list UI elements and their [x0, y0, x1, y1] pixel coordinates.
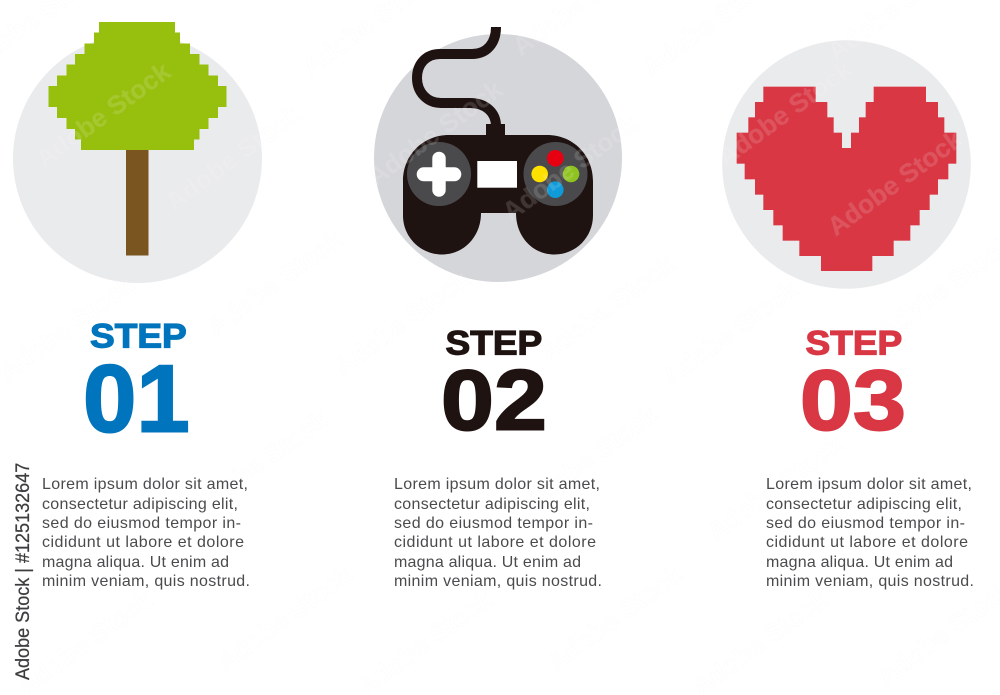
- text block: step 01 description: magna aliqua. Ut enim ad: [42, 554, 229, 571]
- text block: step 01 description: Lorem ipsum dolor sit amet,: [42, 476, 248, 493]
- faint stock watermarks: Adobe Stock: [702, 429, 848, 547]
- faint stock watermarks: Adobe Stock: [362, 74, 508, 192]
- heading: step 02: 02: [441, 353, 547, 448]
- faint stock watermarks: Adobe Stock: [30, 56, 176, 174]
- heading: step 03: 03: [800, 353, 906, 448]
- text block: step 03 description: consectetur adipiscing elit,: [766, 496, 962, 513]
- text block: step 02 description: Lorem ipsum dolor sit amet,: [394, 476, 600, 493]
- panel: step 1 tree: [13, 22, 262, 283]
- text block: step 03 description: magna aliqua. Ut enim ad: [766, 554, 953, 571]
- text block: step 03 description: cididunt ut labore et dolore: [766, 534, 968, 551]
- heading: step 02: STEP: [446, 324, 542, 362]
- text block: step 02 description: magna aliqua. Ut enim ad: [394, 554, 581, 571]
- text block: step 01 description: cididunt ut labore et dolore: [42, 534, 244, 551]
- text block: step 01 description: consectetur adipiscing elit,: [42, 496, 238, 513]
- faint stock watermarks: Adobe Stock: [517, 399, 663, 517]
- text block: step 01 description: sed do eiusmod tempor in-: [42, 515, 241, 532]
- panel: step 3 heart: [722, 40, 971, 289]
- faint stock watermarks: Adobe Stock: [657, 274, 803, 392]
- icon: game controller: [403, 27, 593, 254]
- text block: step 03 description: [766, 476, 974, 590]
- text block: step 02 description: minim veniam, quis nostrud.: [394, 573, 602, 590]
- icon background circle: tree: [13, 34, 262, 283]
- vertical stock credit: Adobe Stock | #125132647: [12, 463, 33, 680]
- text block: step 03 description: sed do eiusmod tempor in-: [766, 515, 965, 532]
- text block: step 02 description: cididunt ut labore et dolore: [394, 534, 596, 551]
- heading: step 01: STEP: [90, 317, 187, 355]
- faint stock watermarks: Adobe Stock: [202, 224, 348, 342]
- faint stock watermarks: Adobe Stock: [542, 559, 688, 677]
- heading: step 01: 01: [83, 346, 190, 452]
- faint stock watermarks: Adobe Stock: [329, 264, 475, 382]
- text block: step 02 description: sed do eiusmod tempor in-: [394, 515, 593, 532]
- faint stock watermarks: Adobe Stock: [160, 99, 306, 217]
- faint stock watermarks: Adobe Stock: [212, 559, 358, 677]
- faint stock watermarks: Adobe Stock: [822, 124, 968, 242]
- panel: step 2 game controller: [374, 27, 622, 282]
- icon background circle: heart: [722, 40, 971, 289]
- faint stock watermarks: Adobe Stock: [534, 249, 680, 367]
- text block: step 02 description: [394, 476, 602, 590]
- icon: pixel tree: [48, 22, 226, 256]
- text block: step 01 description: minim veniam, quis nostrud.: [42, 573, 250, 590]
- faint stock watermarks: Adobe Stock: [712, 54, 858, 172]
- faint stock watermarks: Adobe Stock: [187, 404, 333, 522]
- text block: step 03 description: minim veniam, quis nostrud.: [766, 573, 974, 590]
- icon: pixel heart: [737, 87, 956, 271]
- text block: step 02 description: consectetur adipiscing elit,: [394, 496, 590, 513]
- faint stock watermarks: Adobe Stock: [497, 109, 643, 227]
- icon background circle: controller: [374, 34, 622, 282]
- text block: step 03 description: Lorem ipsum dolor sit amet,: [766, 476, 972, 493]
- text block: step 01 description: [42, 476, 250, 590]
- heading: step 03: STEP: [806, 324, 902, 362]
